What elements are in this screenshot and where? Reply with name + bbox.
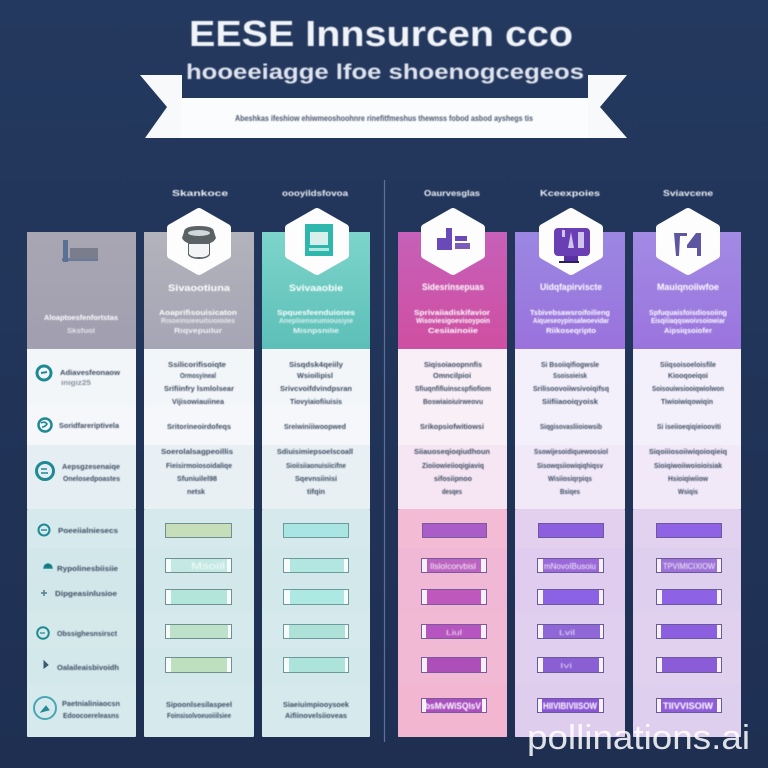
feature icons	[34, 366, 56, 719]
column 3 bar values: Ilslolcorvbisl	[430, 562, 476, 571]
column 4 bar values: Ivi	[560, 663, 573, 670]
column 5 details: Wsiqis	[678, 489, 698, 496]
feature labels: Obssighesnsirsct	[57, 631, 118, 638]
column 5 bar values: TIIVVISOIW	[663, 701, 714, 711]
column 1 details: Vijisowiauiinea	[172, 399, 224, 406]
column 3 rating bars	[422, 524, 486, 712]
column 4 details	[533, 362, 609, 496]
column 5 header text: Mauiqnoiiwfoe	[657, 282, 719, 292]
column 4 header text: Aiqueseoypinsalwoevidar	[533, 318, 609, 325]
column 2 header text: Anepliienseumiousiyie	[279, 318, 353, 325]
column 5 details: Siiqsoisoeloisfile	[660, 362, 716, 369]
column 2 footer text	[283, 702, 349, 720]
column 3 details: Sfiuqnfifiuinscspfiofiom	[415, 386, 491, 393]
column 4 details: Srilisoovoiiwsivoiqifsq	[533, 386, 609, 393]
column 3 details: Srikopsiofwitiowsi	[420, 424, 484, 431]
subtitle: hooeeiagge lfoe shoenogcegeos	[186, 61, 584, 84]
watermark: pollinations.ai	[527, 719, 750, 757]
column 5 header text: Eisqiiiaqqswoivsoiowiar	[651, 318, 725, 325]
column 4 header text: Tsbivebsawsroifoilieng	[530, 310, 610, 317]
column 5 bar values	[663, 562, 715, 711]
column 1 details: Srifiinfry lsmlolsear	[164, 386, 234, 393]
column top labels: Sviavcene	[663, 189, 714, 198]
column 1 bar value: Msoiil	[191, 561, 225, 571]
column 1 body	[144, 349, 254, 737]
title: EESE Innsurcen cco	[189, 13, 573, 54]
column 4 header text: Riikoseqripto	[546, 328, 596, 335]
center divider	[384, 180, 386, 742]
feature labels: Onelosedpoastes	[63, 476, 120, 483]
column 4 details: Ssowijesoidiquewoosiol	[534, 449, 608, 456]
column 0 header text: Aloaptoesfenfortstas	[44, 315, 118, 322]
column 2 header text: Spquesfeenduiones	[277, 310, 355, 317]
column 3 details: Siiauoseqioqiudhoun	[414, 449, 490, 456]
column 1: grey plan	[144, 212, 254, 737]
column 5 details	[649, 362, 727, 496]
column 3 bar values	[425, 562, 481, 711]
column 3 details: Siqisoiaoopnnfis	[424, 362, 482, 369]
column 4 details: Siqgisovasliioiowsib	[540, 424, 602, 431]
column 1 rating bars	[166, 524, 232, 672]
column 2 details: tifqin	[307, 489, 325, 496]
column 5 details: Siqoiiiosoiiwiqoioqieiq	[649, 449, 727, 456]
column 1 header text	[159, 283, 237, 335]
column 0 body	[27, 349, 136, 737]
feature labels: Soridfareriptivela	[59, 423, 119, 430]
column 4 body	[515, 349, 625, 737]
column 5 details: Kiooqoeiqoi	[668, 373, 708, 380]
column 4 header	[515, 232, 625, 349]
column 4 bar values: HIIVIBIVIISOW	[543, 701, 597, 711]
column 5 header text	[649, 282, 727, 335]
ribbon description: Abeshkas ifeshiow ehiwmeoshoohnre rinefitfmeshus thewnss fobod asbod ayshegs tis	[235, 114, 533, 123]
column 2 rating bars	[284, 524, 348, 672]
column 3: pink plan	[398, 212, 507, 737]
column 2 details: Sdiuisimiepsoelscoall	[277, 449, 353, 456]
column 4 bar values	[543, 562, 597, 711]
column 2 hexagon icon	[289, 212, 345, 271]
column 2 body	[262, 349, 370, 737]
column 4 header text	[530, 282, 610, 335]
column 5 body	[633, 349, 741, 737]
column 0: features	[27, 232, 136, 737]
feature labels: Paetnialiniaocsn	[62, 701, 120, 708]
column 1 header text: Aoaprifisouisicaton	[159, 310, 237, 317]
column 3 details: Boswiaioiuirweovu	[423, 399, 483, 406]
column 1 header text: Riqvepuilur	[174, 328, 222, 335]
column top labels: Skankoce	[172, 189, 229, 198]
column top labels: Oaurvesglas	[424, 189, 481, 198]
column 0 header text: Sksfuol	[67, 328, 95, 335]
feature labels: Aepsgzesenaiqe	[62, 464, 120, 471]
column 1 details: netsk	[187, 489, 205, 496]
column 4 details: Sisowqsiiowiqiqhiqsv	[537, 463, 603, 470]
column 4 details: Ssoisoieisk	[553, 373, 587, 380]
column 4 bar values: mNovoIBusoiu	[544, 562, 596, 571]
column 3 details: sifosiipnoo	[434, 476, 472, 483]
column 1 hexagon icon	[171, 212, 227, 271]
column 0 header	[27, 232, 136, 349]
column 3 header text: Sidesrinsepuas	[422, 282, 484, 292]
column 3 details: desqes	[442, 489, 462, 496]
column 3 header text: Cesiiainoiie	[428, 328, 478, 335]
column 3 body	[398, 349, 507, 737]
column 3 header	[398, 232, 507, 349]
column 4: violet plan	[515, 212, 625, 737]
column 1 details: Fieisirmoiosoidaliqe	[166, 463, 232, 470]
column 3 details: Zioiiowieiioqigiaviq	[422, 463, 484, 470]
feature labels: inigiz25	[61, 380, 91, 387]
column 1 header text: Risoeinsieeuitsioioiles	[161, 318, 235, 325]
column 2 header text: Misnpsnilie	[293, 328, 339, 335]
column 1 details: Sritorineoirdofeqs	[167, 424, 231, 431]
column 5 details: Soisouiwsiooiqwiolwon	[652, 386, 724, 393]
column 3 bar values: bsMvWiSQlsV	[425, 701, 481, 711]
column 2 header text: Svivaaobie	[289, 283, 343, 293]
feature labels: Oalaileaisbivoidh	[57, 665, 119, 672]
column 3 details	[414, 362, 491, 496]
column 4 details: Wisiiosiqrpiqs	[548, 476, 592, 483]
column 2 details: Sioiisiiaonuisiicifne	[286, 463, 346, 470]
column top labels: oooyildsfovoa	[282, 189, 349, 198]
column 2 details: Tiovyiaiofiiuisis	[290, 399, 342, 406]
column 5 header text: Aipsiqsoiofer	[664, 328, 712, 335]
feature labels	[55, 370, 121, 720]
column top labels	[172, 189, 714, 198]
column 5 details: Si iseiioeqiqieiooviti	[657, 424, 721, 431]
column 3 header text: Sprivaiiadiskifavior	[414, 310, 490, 317]
column 1 details: Ssilicorifisoiqte	[168, 362, 226, 369]
column 5 header text: Spfuquaisfoisdiosoiing	[649, 310, 727, 317]
column 2 details: Srivcvoifdvindpsran	[280, 386, 352, 393]
column top labels: Kceexpoies	[540, 189, 601, 198]
column 1 details	[161, 362, 234, 496]
column 3 details: Omncilpioi	[433, 373, 471, 380]
column 1 footer text: Sipoonlsesilaspeel	[166, 702, 232, 709]
column 3 hexagon icon	[425, 212, 481, 271]
feature labels: Edoocoereleasns	[63, 713, 119, 720]
column 2 header	[262, 232, 370, 349]
column 5 hexagon icon	[660, 212, 716, 271]
column 1 details: Soerolalsagpeoillis	[161, 449, 233, 456]
column 5 bar values: TPVIMICIXIOW	[663, 562, 715, 571]
column 0 header icon	[62, 240, 98, 262]
column 1 details: Ormosyineal	[180, 373, 216, 380]
column 1 header text: Sivaootiuna	[168, 283, 231, 293]
column 1 details: Sfuniuilel98	[177, 476, 217, 483]
column 5: purple plan	[633, 212, 741, 737]
column 1 footer text	[166, 702, 232, 720]
feature labels: Adiavesfeonaow	[60, 370, 121, 377]
column 1 header	[144, 232, 254, 349]
column 1 footer text: Foinsisolvoeuoiiilsiee	[167, 713, 231, 720]
column 5 header	[633, 232, 741, 349]
ribbon banner	[140, 75, 627, 138]
column 5 details: Sioiqiwoiiwoioioisiak	[654, 463, 722, 470]
column 4 details: Siifiiaooiqyoisk	[542, 399, 598, 406]
column 2 details: Wsioilipisl	[297, 373, 333, 380]
column 0 header text	[44, 315, 118, 335]
column 2 details: Sqevnsiinisi	[295, 476, 337, 483]
column 2 footer text: Aifiinovelsiioveas	[285, 713, 347, 720]
column 5 rating bars	[656, 524, 722, 712]
column 5 details: Hsioiqiwiiow	[668, 476, 709, 483]
feature labels: Poeeiialniesecs	[58, 528, 118, 535]
column 2 details	[277, 362, 353, 496]
column 4 rating bars	[538, 524, 604, 712]
feature labels: Dipgeasinlusioe	[55, 591, 117, 598]
column 4 details: Si Bsoiiqifiogwsle	[541, 362, 599, 369]
column 4 header text: Uidqfapirviscte	[540, 282, 602, 292]
column 4 hexagon icon	[543, 212, 599, 271]
column 2 details: Sisqdsk4qeiily	[289, 362, 343, 369]
column 3 header text	[414, 282, 490, 335]
column 3 header text: Wisoviesigoevisoypoin	[416, 318, 490, 325]
column 4 bar values: Lvil	[559, 630, 576, 637]
column 3 bar values: Liul	[446, 630, 463, 637]
column 5 details: Tiwioiwiqowiqin	[661, 399, 713, 406]
column 2 footer text: Siaeiuimpiooysoek	[283, 702, 349, 709]
column 4 details: Bsiqes	[560, 489, 580, 496]
column 2 header text	[277, 283, 355, 335]
column 2 details: Sreiwiniiiwoopwed	[284, 424, 346, 431]
column 2: teal plan	[262, 212, 370, 737]
feature labels: Rypolinesbiisiie	[57, 566, 118, 573]
